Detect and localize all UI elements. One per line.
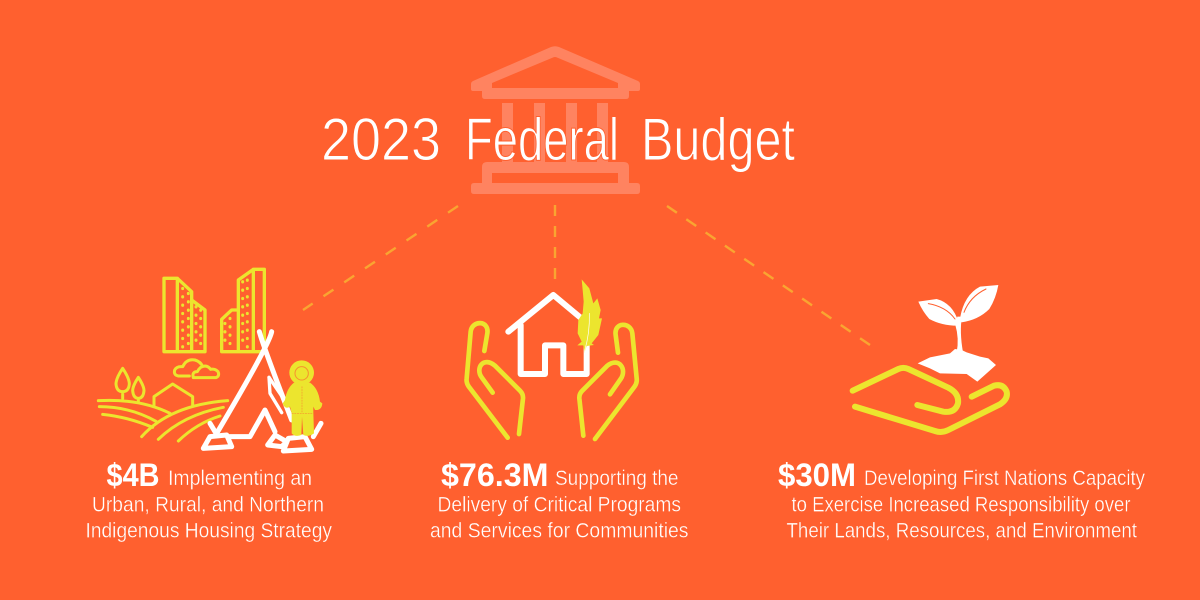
stem: [955, 317, 963, 352]
text block: programs and services: [430, 457, 688, 542]
title: 2023: [321, 106, 441, 173]
text block: programs and services: and Services for Communities: [430, 518, 688, 542]
text block: housing strategy: [86, 457, 332, 542]
left tower block: [164, 278, 205, 352]
person in parka: [283, 360, 322, 436]
right hand: [579, 325, 637, 439]
hand: [853, 368, 1007, 432]
title: Budget: [641, 106, 795, 173]
icon: city, farmland, tipi and person: [98, 269, 322, 451]
text block: First Nations capacity: to Exercise Increased Responsibility over: [792, 492, 1130, 516]
text block: programs and services: Supporting the: [555, 466, 678, 490]
text block: housing strategy: Implementing an: [168, 466, 312, 490]
tipi: [203, 332, 321, 451]
left hand: [467, 323, 523, 438]
text block: First Nations capacity: Their Lands, Resources, and Environment: [786, 518, 1137, 542]
dashed connector: centre: [554, 205, 556, 280]
text block: housing strategy: Urban, Rural, and Northern: [92, 492, 324, 516]
right leaf: [960, 285, 998, 322]
icon: hands holding house with feather: [467, 279, 637, 439]
left leaf: [918, 299, 958, 326]
icon: hand holding sprout: [853, 285, 1007, 432]
text block: housing strategy: Indigenous Housing Strategy: [86, 518, 332, 542]
text block: programs and services: Delivery of Critical Programs: [438, 492, 681, 516]
clouds: [174, 360, 219, 378]
soil: [918, 349, 996, 382]
house: [508, 295, 587, 374]
trees: [116, 368, 144, 402]
right tower block: [222, 269, 264, 352]
title: [321, 106, 795, 173]
text block: First Nations capacity: [778, 457, 1145, 542]
icon: government building: [471, 46, 640, 194]
amount: $4B: $4B: [106, 457, 160, 493]
dashed connector: right: [667, 206, 870, 345]
title: Federal: [465, 106, 619, 173]
text block: First Nations capacity: Developing First Nations Capacity: [864, 466, 1145, 490]
feather: [577, 279, 602, 353]
amount: $30M: $30M: [778, 457, 856, 493]
dashed connector: left: [303, 206, 458, 310]
farmhouse: [154, 384, 193, 407]
farm fields: [98, 400, 228, 441]
amount: $76.3M: $76.3M: [441, 457, 548, 493]
